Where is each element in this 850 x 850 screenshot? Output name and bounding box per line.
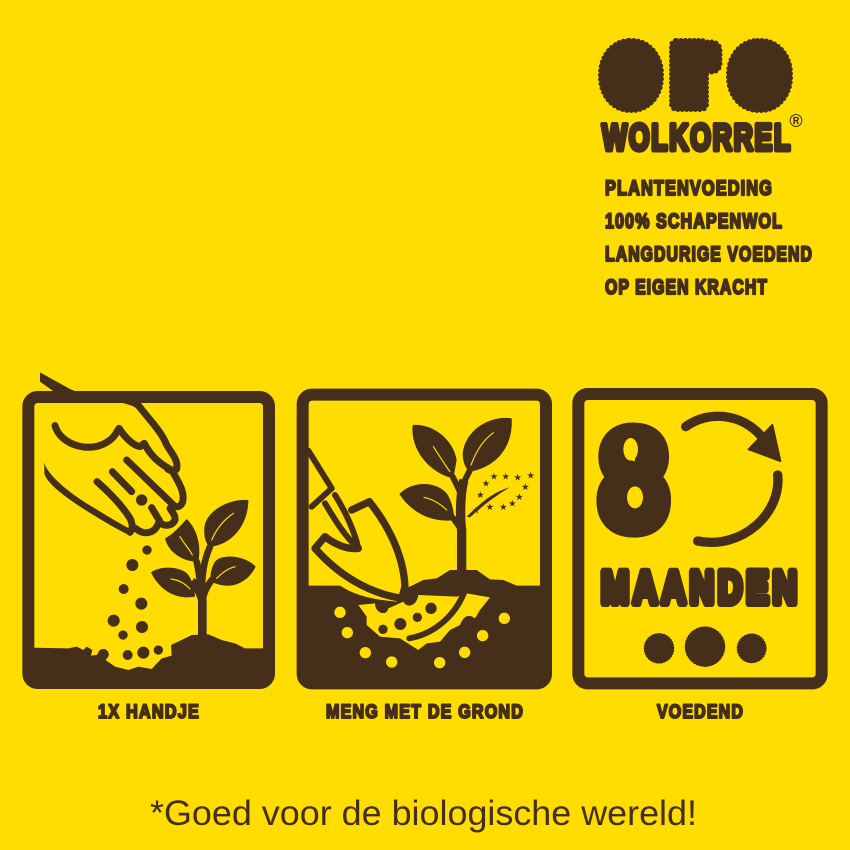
panel: 8 months <box>578 394 822 683</box>
product claims text: 100% SCHAPENWOL <box>605 210 783 233</box>
icon: falling pellets <box>98 545 163 660</box>
frame <box>28 397 269 683</box>
icon: cycle arrow <box>686 416 780 542</box>
number 8: 8 <box>602 406 666 555</box>
logo wordmark: oro: o <box>735 27 783 116</box>
icon: EU organic leaf: ★ <box>482 478 490 489</box>
caption: meng met de grond: MENG MET DE GROND <box>326 702 524 723</box>
caption: voedend: VOEDEND <box>657 702 744 723</box>
logo wordmark: oro <box>600 27 790 116</box>
soil <box>28 634 269 683</box>
icon: EU organic leaf: ★ <box>472 505 480 516</box>
panel: mix with soil <box>303 395 546 683</box>
product claims text: PLANTENVOEDING <box>605 177 773 200</box>
caption: 1x handje: 1X HANDJE <box>98 702 200 723</box>
icon: EU organic leaf: ★ <box>521 482 530 493</box>
icon: EU organic leaf <box>467 471 535 517</box>
icon: EU organic leaf: ★ <box>508 498 517 509</box>
logo: oro wolkorrel <box>600 27 803 158</box>
icon: EU organic leaf: ★ <box>501 471 510 482</box>
icon: seedling <box>399 418 512 571</box>
logo wordmark: oro: r <box>675 30 705 114</box>
icon: EU organic leaf: ★ <box>490 471 498 482</box>
icon: shovel <box>308 451 405 598</box>
icon: EU organic leaf: ★ <box>499 502 508 513</box>
icon: yellow pellets in soil <box>334 607 510 668</box>
registered mark: ® <box>789 111 803 131</box>
icon: brown pellets in pocket <box>378 603 437 634</box>
soil with yellow dug pocket <box>303 570 546 683</box>
frame <box>578 394 822 683</box>
icon: EU organic leaf: ★ <box>486 502 494 513</box>
icon: EU organic leaf: ★ <box>476 490 485 501</box>
footer tagline: *Goed voor de biologische wereld! <box>150 794 697 833</box>
icon: EU organic leaf: ★ <box>513 472 522 483</box>
icon: EU organic leaf: ★ <box>515 492 524 503</box>
icon: root <box>409 590 465 638</box>
icon: hand <box>40 372 183 536</box>
logo wordmark: oro: o <box>607 27 655 116</box>
frame <box>303 395 546 683</box>
icon: EU organic leaf: ★ <box>526 471 535 482</box>
icon: three pellets <box>645 628 765 665</box>
product claims text <box>605 177 813 299</box>
panel: one handful <box>28 372 269 683</box>
product claims text: OP EIGEN KRACHT <box>605 276 768 299</box>
icon: seedling <box>151 500 256 636</box>
